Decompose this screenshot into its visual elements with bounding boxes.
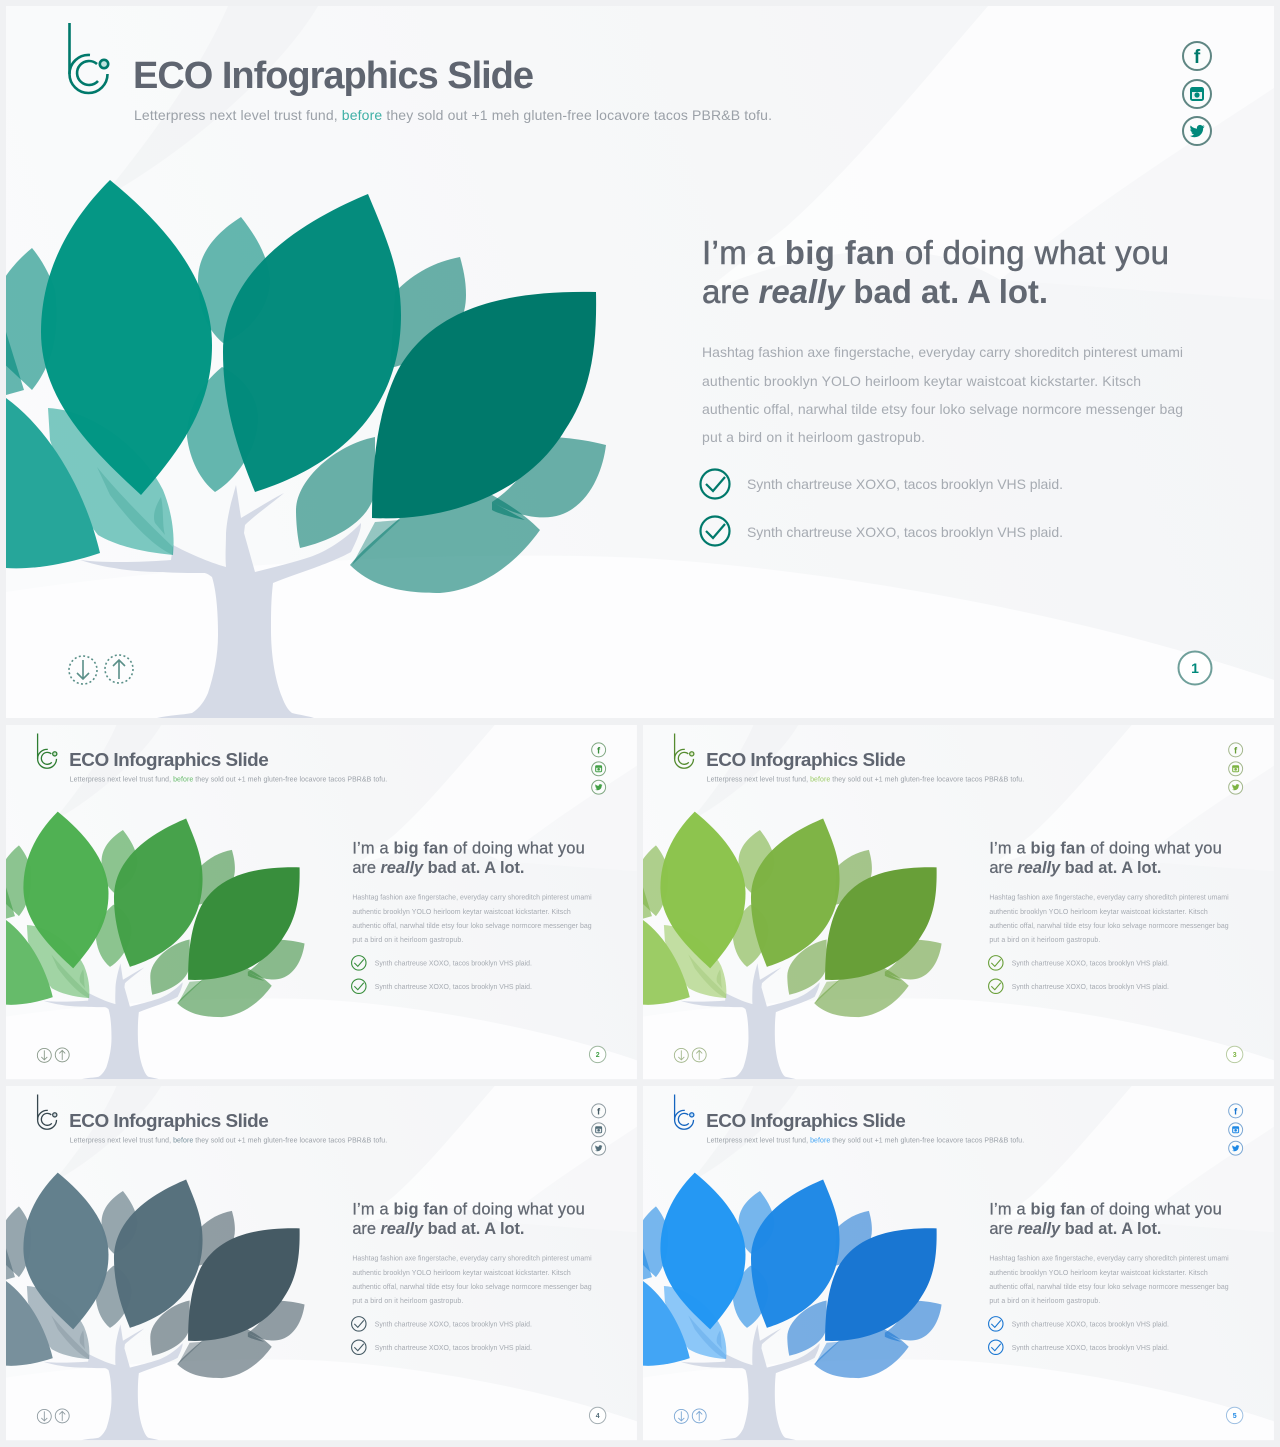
body text: put a bird on it heirloom gastropub.: [989, 1298, 1100, 1305]
heading: I’m a big fan of doing what you: [702, 234, 1169, 271]
checklist: Synth chartreuse XOXO, tacos brooklyn VHS plaid.: [1012, 984, 1169, 991]
logo: [675, 1094, 694, 1129]
social icons: [592, 1104, 606, 1155]
logo: [38, 1094, 57, 1129]
heading: [989, 1200, 1222, 1238]
page number: [1178, 652, 1212, 684]
checklist: Synth chartreuse XOXO, tacos brooklyn VHS plaid.: [1012, 1345, 1169, 1352]
tree canopy and trunk: [3, 812, 305, 1079]
checklist: Synth chartreuse XOXO, tacos brooklyn VHS plaid.: [1012, 960, 1169, 967]
navigation arrows: [69, 655, 133, 684]
tree canopy and trunk: [0, 180, 606, 718]
logo: [675, 733, 694, 768]
page number: [1226, 1407, 1243, 1424]
body text: [352, 895, 592, 944]
body text: [352, 1256, 592, 1305]
checklist: [989, 956, 1169, 993]
heading: are really bad at. A lot.: [702, 273, 1048, 310]
social icons: f: [1194, 47, 1201, 68]
page number: 5: [1233, 1413, 1237, 1420]
page number: [1226, 1046, 1243, 1063]
heading: are really bad at. A lot.: [989, 1220, 1161, 1238]
checklist: Synth chartreuse XOXO, tacos brooklyn VHS plaid.: [375, 984, 532, 991]
body text: [989, 1256, 1229, 1305]
subtitle: Letterpress next level trust fund, before they sold out +1 meh gluten-free locavore tacos PBR&B tofu.: [70, 1138, 387, 1145]
body text: put a bird on it heirloom gastropub.: [352, 1298, 463, 1305]
page number: 2: [596, 1052, 600, 1059]
title: ECO Infographics Slide: [69, 750, 269, 771]
subtitle: Letterpress next level trust fund, before they sold out +1 meh gluten-free locavore tacos PBR&B tofu.: [707, 1138, 1024, 1145]
navigation arrows: [37, 1409, 69, 1423]
heading: I’m a big fan of doing what you: [989, 839, 1222, 857]
page number: [589, 1046, 606, 1063]
social icons: [1229, 1104, 1243, 1155]
body text: put a bird on it heirloom gastropub.: [989, 937, 1100, 944]
body text: authentic offal, narwhal tilde etsy four loko selvage normcore messenger bag: [989, 923, 1229, 930]
title: ECO Infographics Slide: [706, 1111, 906, 1132]
title: ECO Infographics Slide: [133, 55, 534, 97]
heading: are really bad at. A lot.: [352, 1220, 524, 1238]
page number: 4: [596, 1413, 600, 1420]
checklist: [352, 1317, 532, 1354]
heading: I’m a big fan of doing what you: [989, 1200, 1222, 1218]
body text: Hashtag fashion axe fingerstache, everyday carry shoreditch pinterest umami: [352, 1256, 592, 1263]
panel: slate slide 4: [3, 1086, 637, 1440]
tree canopy and trunk: [3, 1173, 305, 1440]
page number: 3: [1233, 1052, 1237, 1059]
body text: authentic offal, narwhal tilde etsy four loko selvage normcore messenger bag: [352, 1284, 592, 1291]
heading: [989, 839, 1222, 877]
body text: Hashtag fashion axe fingerstache, everyday carry shoreditch pinterest umami: [352, 895, 592, 902]
social icons: f: [1234, 745, 1238, 756]
checklist: Synth chartreuse XOXO, tacos brooklyn VHS plaid.: [375, 1321, 532, 1328]
heading: [702, 234, 1169, 310]
heading: [352, 839, 585, 877]
tree canopy and trunk: [640, 812, 942, 1079]
heading: I’m a big fan of doing what you: [352, 1200, 585, 1218]
body text: authentic offal, narwhal tilde etsy four loko selvage normcore messenger bag: [989, 1284, 1229, 1291]
panel: lime slide 3: [640, 725, 1274, 1079]
social icons: f: [597, 1106, 601, 1117]
body text: put a bird on it heirloom gastropub.: [352, 937, 463, 944]
checklist: [352, 956, 532, 993]
social icons: [1229, 743, 1243, 794]
body text: Hashtag fashion axe fingerstache, everyday carry shoreditch pinterest umami: [989, 895, 1229, 902]
checklist: Synth chartreuse XOXO, tacos brooklyn VHS plaid.: [747, 524, 1063, 540]
page number: [589, 1407, 606, 1424]
logo: [69, 23, 108, 93]
social icons: f: [597, 745, 601, 756]
body text: authentic offal, narwhal tilde etsy four loko selvage normcore messenger bag: [352, 923, 592, 930]
checklist: Synth chartreuse XOXO, tacos brooklyn VHS plaid.: [375, 1345, 532, 1352]
navigation arrows: [674, 1048, 706, 1062]
body text: [702, 344, 1183, 445]
social icons: [592, 743, 606, 794]
heading: are really bad at. A lot.: [989, 859, 1161, 877]
social icons: [1183, 42, 1211, 145]
logo: [38, 733, 57, 768]
body text: authentic brooklyn YOLO heirloom keytar waistcoat kickstarter. Kitsch: [989, 1270, 1208, 1277]
panel: teal slide 1: [0, 6, 1274, 718]
panel: blue slide 5: [640, 1086, 1274, 1440]
body text: Hashtag fashion axe fingerstache, everyday carry shoreditch pinterest umami: [702, 344, 1183, 360]
heading: are really bad at. A lot.: [352, 859, 524, 877]
body text: authentic brooklyn YOLO heirloom keytar waistcoat kickstarter. Kitsch: [352, 1270, 571, 1277]
heading: [352, 1200, 585, 1238]
title: ECO Infographics Slide: [706, 750, 906, 771]
checklist: [989, 1317, 1169, 1354]
title: ECO Infographics Slide: [69, 1111, 269, 1132]
checklist: Synth chartreuse XOXO, tacos brooklyn VHS plaid.: [747, 476, 1063, 492]
tree canopy and trunk: [640, 1173, 942, 1440]
navigation arrows: [37, 1048, 69, 1062]
body text: authentic brooklyn YOLO heirloom keytar waistcoat kickstarter. Kitsch: [352, 909, 571, 916]
subtitle: Letterpress next level trust fund, before they sold out +1 meh gluten-free locavore tacos PBR&B tofu.: [70, 777, 387, 784]
body text: authentic offal, narwhal tilde etsy four loko selvage normcore messenger bag: [702, 401, 1183, 417]
panel: green slide 2: [3, 725, 637, 1079]
social icons: f: [1234, 1106, 1238, 1117]
checklist: Synth chartreuse XOXO, tacos brooklyn VHS plaid.: [1012, 1321, 1169, 1328]
subtitle: Letterpress next level trust fund, before they sold out +1 meh gluten-free locavore tacos PBR&B tofu.: [134, 107, 772, 123]
page number: 1: [1191, 660, 1199, 676]
body text: put a bird on it heirloom gastropub.: [702, 429, 925, 445]
body text: [989, 895, 1229, 944]
body text: Hashtag fashion axe fingerstache, everyday carry shoreditch pinterest umami: [989, 1256, 1229, 1263]
body text: authentic brooklyn YOLO heirloom keytar waistcoat kickstarter. Kitsch: [989, 909, 1208, 916]
navigation arrows: [674, 1409, 706, 1423]
checklist: Synth chartreuse XOXO, tacos brooklyn VHS plaid.: [375, 960, 532, 967]
body text: authentic brooklyn YOLO heirloom keytar waistcoat kickstarter. Kitsch: [702, 373, 1141, 389]
checklist: [700, 470, 1063, 546]
subtitle: Letterpress next level trust fund, before they sold out +1 meh gluten-free locavore tacos PBR&B tofu.: [707, 777, 1024, 784]
heading: I’m a big fan of doing what you: [352, 839, 585, 857]
